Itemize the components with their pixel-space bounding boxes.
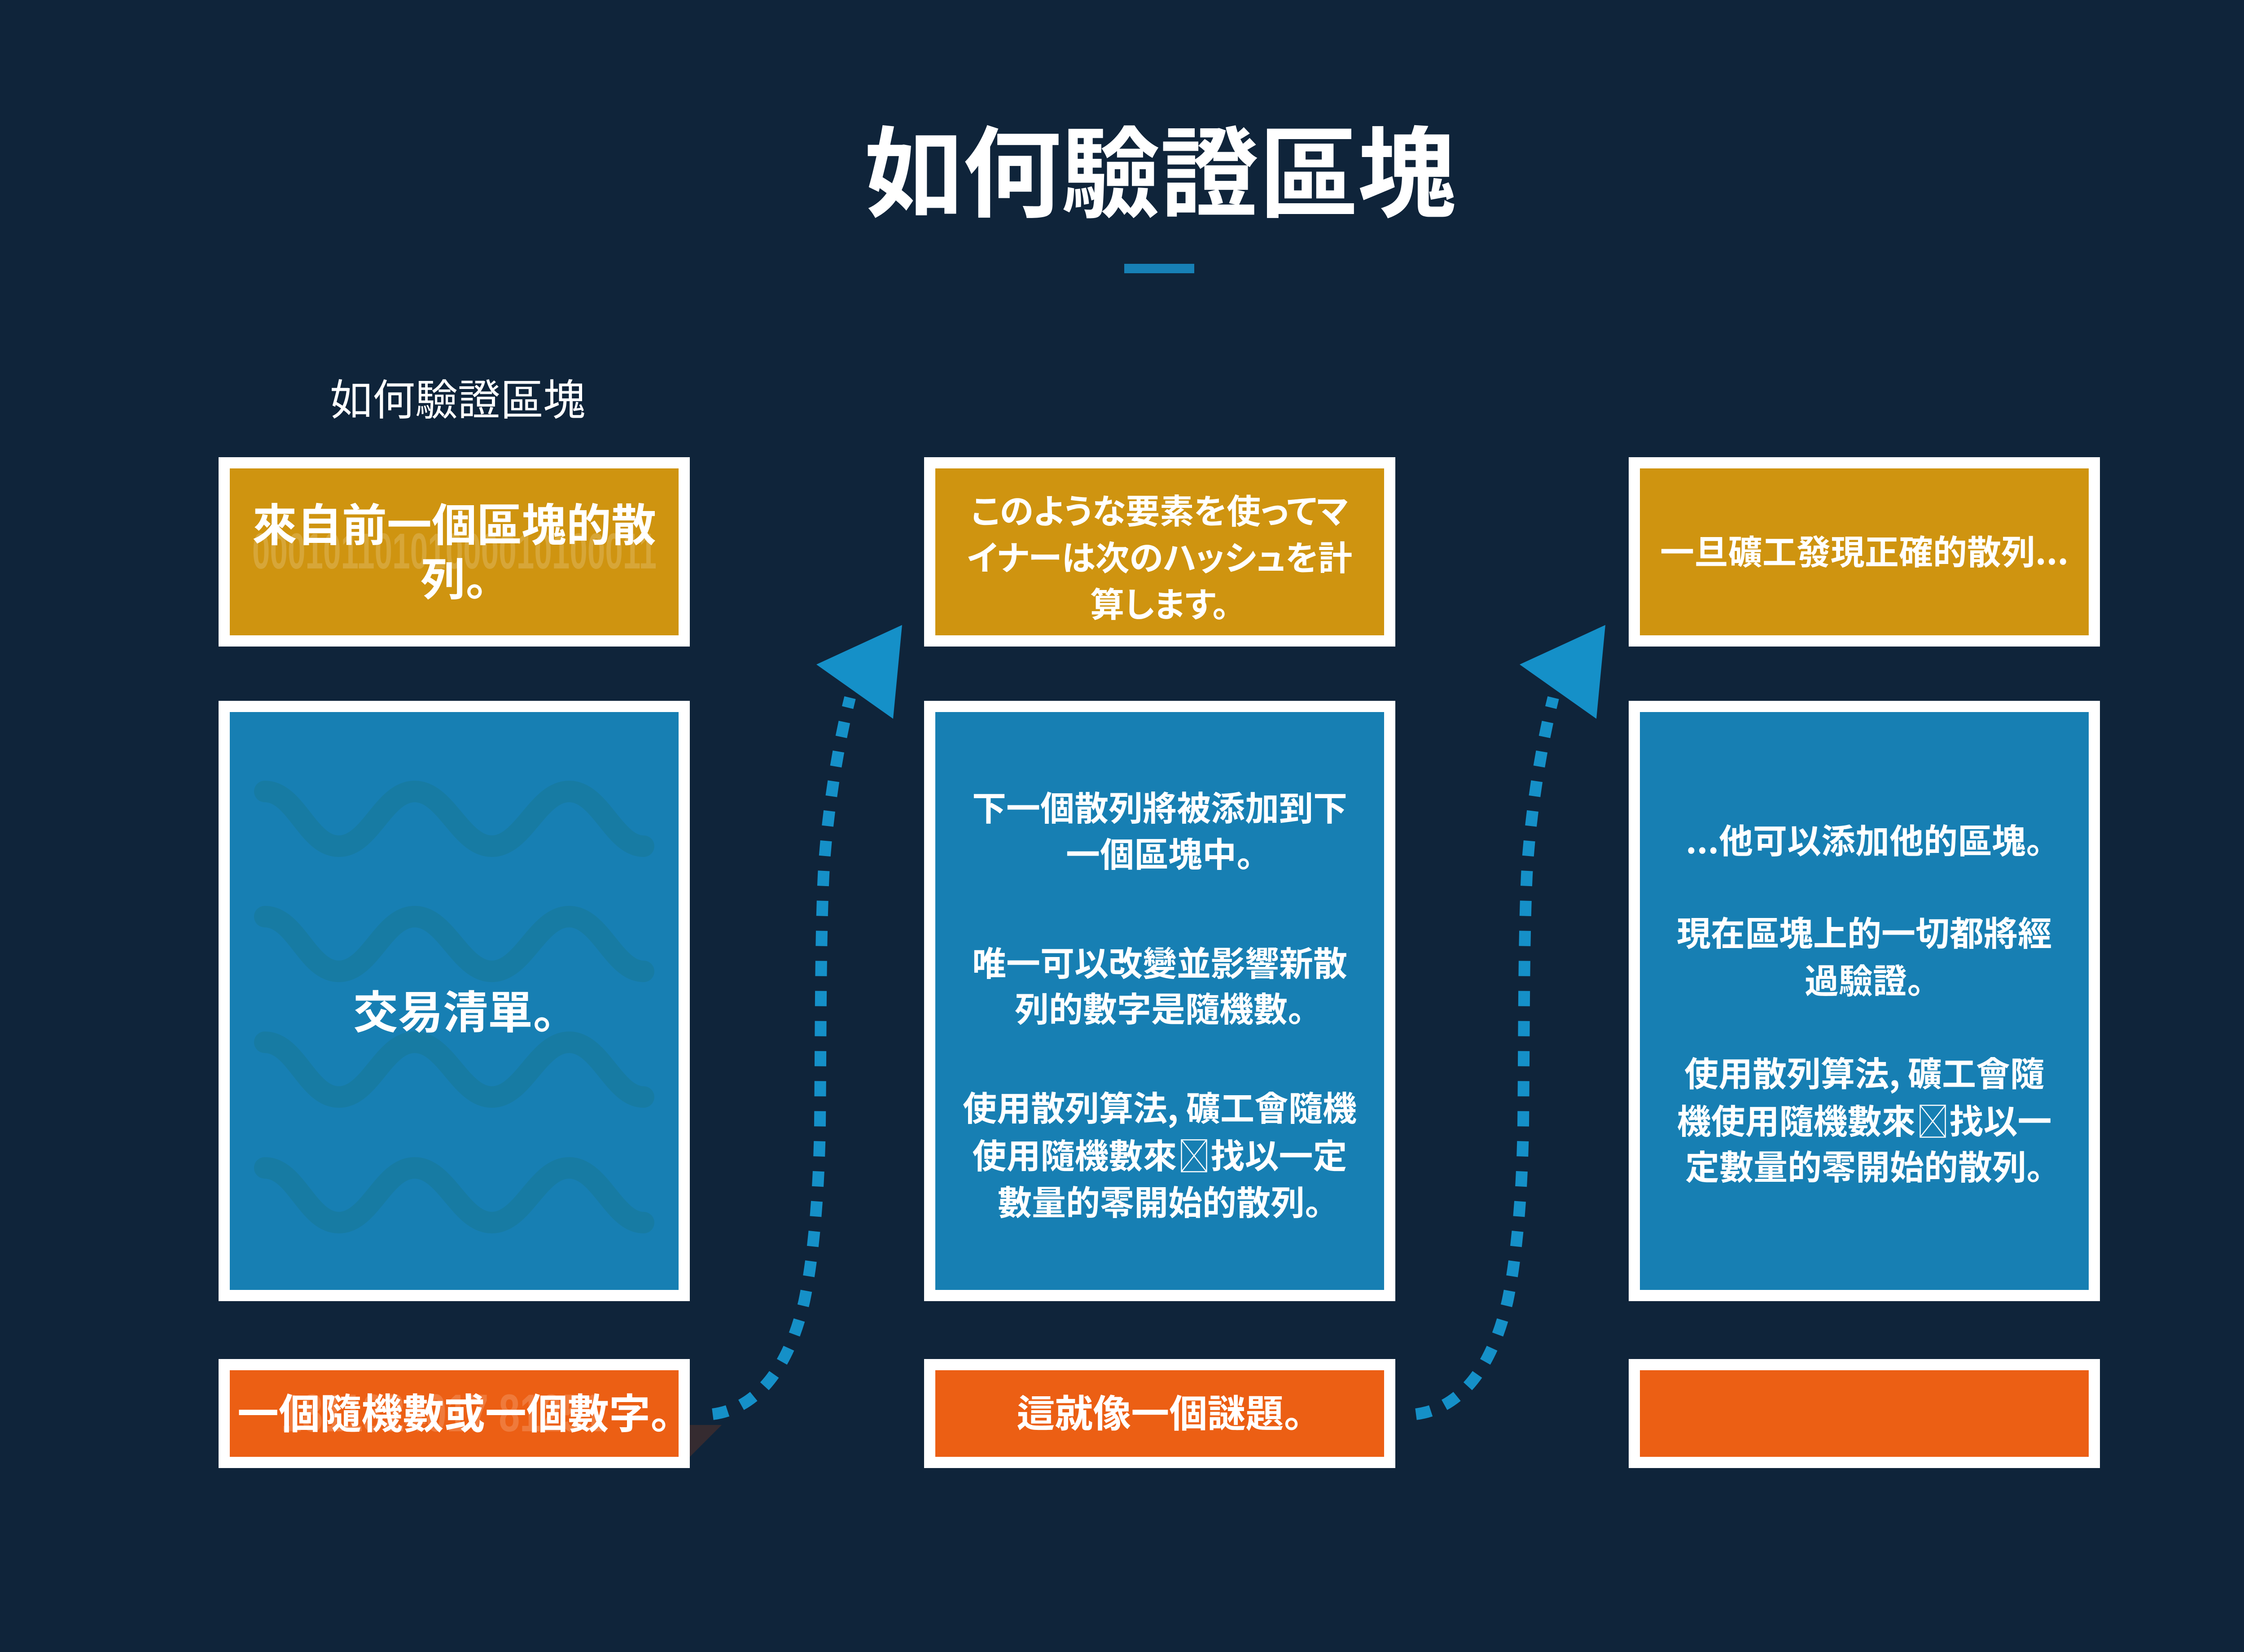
panel text: このような要素を使ってマ	[971, 484, 1348, 533]
panel text: 一個隨機數或一個數字。	[237, 1381, 671, 1441]
panel: nonce	[219, 1359, 690, 1468]
arrow: column 2 to column 3	[1403, 619, 1614, 1422]
panel: miner finds hash	[1629, 457, 2100, 647]
panel text: 使用隨機數來 找以一定	[972, 1129, 1347, 1178]
title underline accent	[1124, 264, 1194, 273]
panel text: 一個區塊中。	[1066, 827, 1253, 877]
panel text: 列的數字是隨機數。	[1015, 982, 1305, 1031]
title: 如何驗證區塊	[864, 95, 1456, 238]
panel text: 列。	[421, 543, 488, 608]
arrow: column 1 to column 2	[700, 619, 911, 1422]
panel text: 下一個散列將被添加到下	[972, 781, 1347, 830]
panel: previous block hash	[219, 457, 690, 647]
panel text: 使用散列算法, 礦工會隨	[1684, 1047, 2044, 1096]
panel text: 數量的零開始的散列。	[998, 1176, 1322, 1225]
panel text	[230, 468, 679, 635]
panel: hashing explanation	[924, 701, 1395, 1301]
panel text: 過驗證。	[1805, 954, 1924, 1003]
panel text: 一旦礦工發現正確的散列...	[1660, 525, 2069, 574]
wave pattern	[219, 701, 690, 1301]
panel text: ...他可以添加他的區塊。	[1686, 814, 2043, 863]
panel text: 唯一可以改變並影響新散	[972, 936, 1347, 986]
panel: hash calculation	[924, 457, 1395, 647]
panel text: 機使用隨機數來 找以一	[1677, 1094, 2052, 1144]
panel: block verified	[1629, 701, 2100, 1301]
panel text: 算します。	[1090, 577, 1229, 627]
subheading: 如何驗證區塊	[330, 366, 586, 428]
panel text	[935, 468, 1384, 635]
shadow under number box	[690, 1425, 722, 1457]
panel: transaction list	[219, 701, 690, 1301]
panel text: 定數量的零開始的散列。	[1685, 1140, 2043, 1189]
panel: puzzle	[924, 1359, 1395, 1468]
panel text: 來自前一個區塊的散	[252, 489, 656, 554]
panel text: イナーは次のハッシュを計	[967, 531, 1352, 580]
panel text: 交易清單。	[353, 976, 555, 1041]
panel text: 使用散列算法, 礦工會隨機	[963, 1081, 1357, 1131]
panel text: 現在區塊上的一切都將經	[1677, 906, 2052, 956]
panel text	[1640, 712, 2089, 1290]
panel: empty orange box	[1629, 1359, 2100, 1468]
panel text	[935, 712, 1384, 1290]
panel text: 這就像一個謎題。	[1017, 1383, 1303, 1438]
